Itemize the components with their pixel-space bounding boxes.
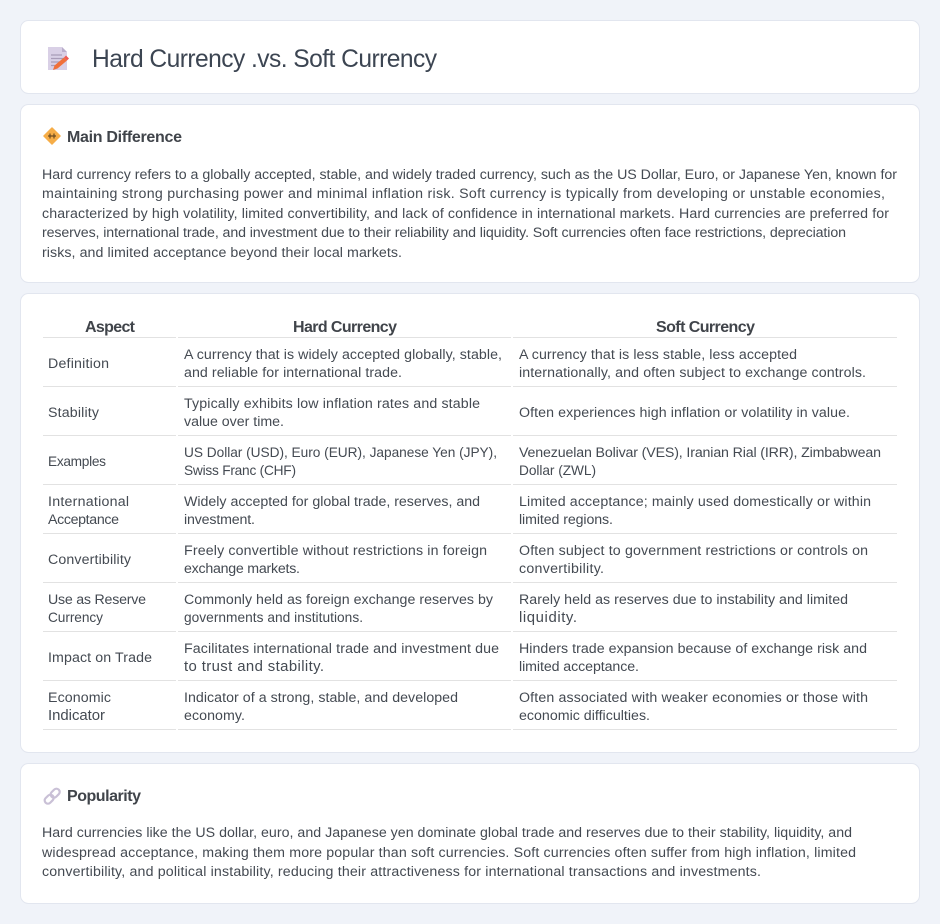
title text: Hard Currency .vs. Soft Currency — [92, 46, 438, 73]
row: international acceptance — [48, 494, 871, 528]
heading: main difference: Main Difference — [67, 129, 182, 146]
row: use as reserve currency — [48, 592, 848, 626]
main difference paragraph: Hard currency refers to a globally accepted, stable, and widely traded currency, such as the US Dollar, Euro, or Japanese Yen, known for — [42, 167, 897, 183]
row: definition: A currency that is less stable, less accepted — [519, 347, 797, 363]
row: convertibility: convertibility. — [519, 561, 604, 577]
row: definition: Definition — [48, 356, 109, 372]
main difference paragraph: maintaining strong purchasing power and minimal inflation risk. Soft currency is typically from developing or unstable economies, — [42, 186, 885, 202]
row: economic indicator: Often associated with weaker economies or those with — [519, 690, 868, 706]
row: international acceptance: Limited acceptance; mainly used domestically or within — [519, 494, 871, 510]
row: economic indicator: Indicator of a strong, stable, and developed — [184, 690, 458, 706]
row: definition: A currency that is widely accepted globally, stable, — [184, 347, 502, 363]
row: economic indicator: Economic — [48, 690, 111, 706]
panel: comparison table — [20, 294, 920, 752]
row: economic indicator: economy. — [184, 708, 245, 724]
row: stability: value over time. — [184, 414, 284, 430]
row: stability: Stability — [48, 405, 100, 421]
row: economic indicator — [48, 690, 868, 724]
row: stability: Often experiences high inflation or volatility in value. — [519, 405, 850, 421]
row: international acceptance: investment. — [184, 512, 255, 528]
row: international acceptance: Widely accepted for global trade, reserves, and — [184, 494, 480, 510]
row: use as reserve currency: Rarely held as reserves due to instability and limited — [519, 592, 848, 608]
panel: main difference — [20, 104, 920, 282]
row: convertibility: exchange markets. — [184, 561, 300, 577]
row: use as reserve currency: liquidity. — [519, 610, 577, 626]
popularity paragraph: Hard currencies like the US dollar, euro, and Japanese yen dominate global trade and reserves due to their stability, liquidity, and — [42, 825, 852, 841]
row: examples: US Dollar (USD), Euro (EUR), Japanese Yen (JPY), — [184, 445, 497, 460]
row: impact on trade: to trust and stability. — [184, 659, 324, 675]
row: examples: Dollar (ZWL) — [519, 463, 596, 478]
row: impact on trade: Impact on Trade — [48, 650, 152, 666]
row: use as reserve currency: Currency — [48, 610, 103, 625]
popularity paragraph — [41, 825, 856, 880]
table header row: Soft Currency — [656, 319, 755, 336]
row: international acceptance: Acceptance — [48, 512, 119, 528]
row: examples: Swiss Franc (CHF) — [184, 463, 296, 478]
main difference paragraph: characterized by high volatility, limited convertibility, and lack of confidence in international markets. Hard currencies are preferred for — [42, 206, 889, 222]
icon: chain link — [43, 787, 61, 805]
row: impact on trade: Facilitates international trade and investment due — [184, 641, 499, 657]
row: convertibility: Freely convertible without restrictions in foreign — [184, 543, 487, 559]
row: stability — [48, 396, 850, 430]
row: impact on trade: Hinders trade expansion because of exchange risk and — [519, 641, 867, 657]
panel: popularity — [20, 764, 920, 904]
main difference paragraph: risks, and limited acceptance beyond their local markets. — [42, 245, 402, 261]
row: convertibility — [48, 543, 868, 577]
row: use as reserve currency: governments and institutions. — [184, 610, 363, 625]
row: international acceptance: limited regions. — [519, 512, 613, 528]
row: economic indicator: economic difficulties. — [519, 708, 650, 724]
row: impact on trade: limited acceptance. — [519, 659, 639, 675]
row: use as reserve currency: Commonly held as foreign exchange reserves by — [184, 592, 494, 608]
main difference paragraph: reserves, international trade, and investment due to their reliability and liquidity. Soft currencies often face restrictions, depreciation — [42, 225, 846, 241]
row: definition — [48, 347, 866, 381]
row: use as reserve currency: Use as Reserve — [48, 592, 146, 608]
row: examples — [48, 445, 881, 478]
row: international acceptance: International — [48, 494, 129, 510]
row: economic indicator: Indicator — [48, 708, 105, 724]
icon: orange diamond sign — [44, 128, 60, 144]
row: convertibility: Often subject to government restrictions or controls on — [519, 543, 868, 559]
table header row — [85, 319, 755, 336]
row: definition: and reliable for international trade. — [184, 365, 402, 381]
popularity paragraph: convertibility, and political instability, reducing their attractiveness for international transactions and investments. — [42, 864, 761, 880]
row: examples: Examples — [48, 454, 106, 469]
row: impact on trade — [48, 641, 867, 675]
popularity paragraph: widespread acceptance, making them more popular than soft currencies. Soft currencies often suffer from high inflation, limited — [41, 845, 856, 861]
row: stability: Typically exhibits low inflation rates and stable — [184, 396, 480, 412]
row: examples: Venezuelan Bolivar (VES), Iranian Rial (IRR), Zimbabwean — [519, 445, 881, 461]
table header row: Aspect — [85, 319, 136, 336]
row: definition: internationally, and often subject to exchange controls. — [519, 365, 866, 381]
table header row: Hard Currency — [293, 319, 397, 336]
icon: memo with pencil — [48, 47, 69, 70]
row: convertibility: Convertibility — [48, 552, 132, 568]
main difference paragraph — [42, 167, 897, 261]
heading: popularity: Popularity — [67, 788, 141, 805]
panel: title — [20, 20, 920, 94]
